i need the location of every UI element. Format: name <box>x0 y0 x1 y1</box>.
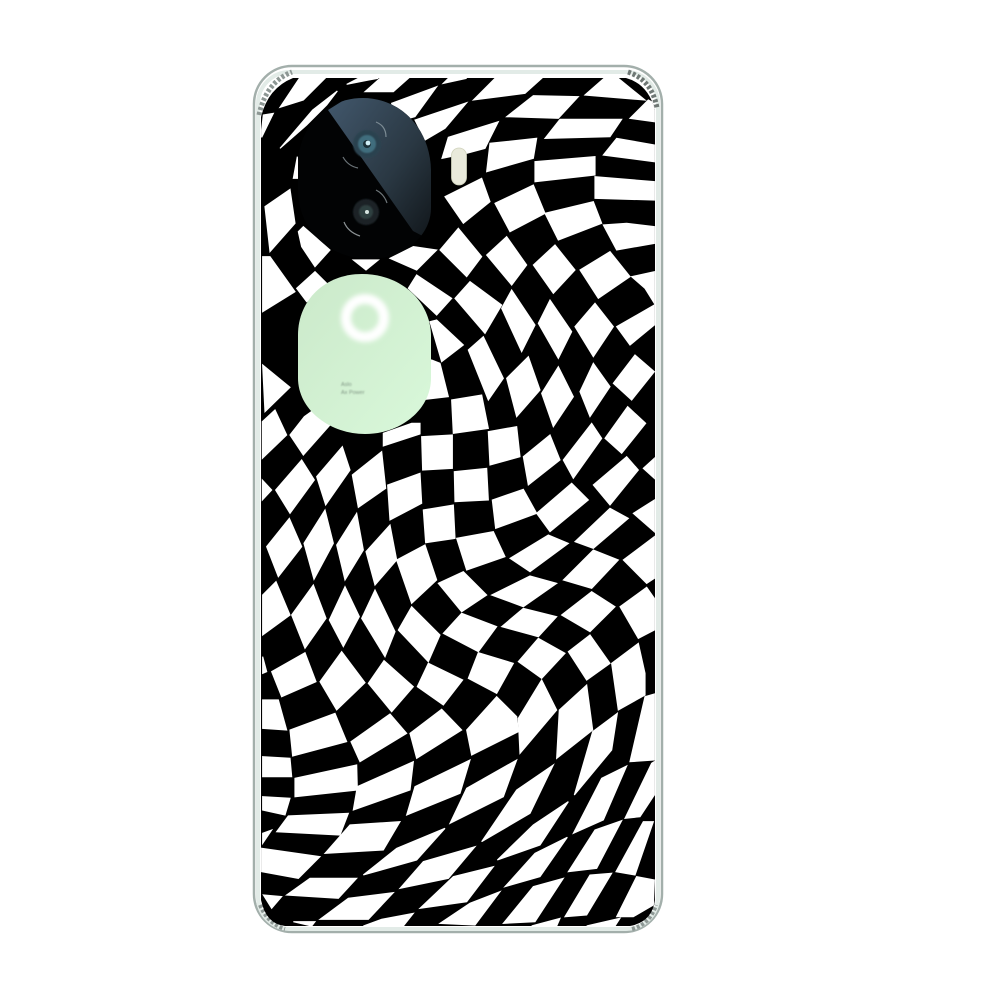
lower white checks <box>262 500 654 926</box>
upper lens <box>343 122 386 168</box>
phone case illustration <box>252 64 664 934</box>
middle white checks <box>262 407 654 543</box>
camera module <box>298 98 431 252</box>
flash <box>452 148 466 185</box>
clear case frame <box>254 66 662 932</box>
lower lens <box>344 190 387 236</box>
glow ring <box>346 299 384 337</box>
green pill module: Ax Power <box>341 390 365 396</box>
small print: Aslo <box>341 382 352 388</box>
upper white checks <box>262 78 654 433</box>
camera glass highlight <box>328 98 431 236</box>
green pill module <box>298 274 431 434</box>
checkerboard panel <box>261 78 655 926</box>
